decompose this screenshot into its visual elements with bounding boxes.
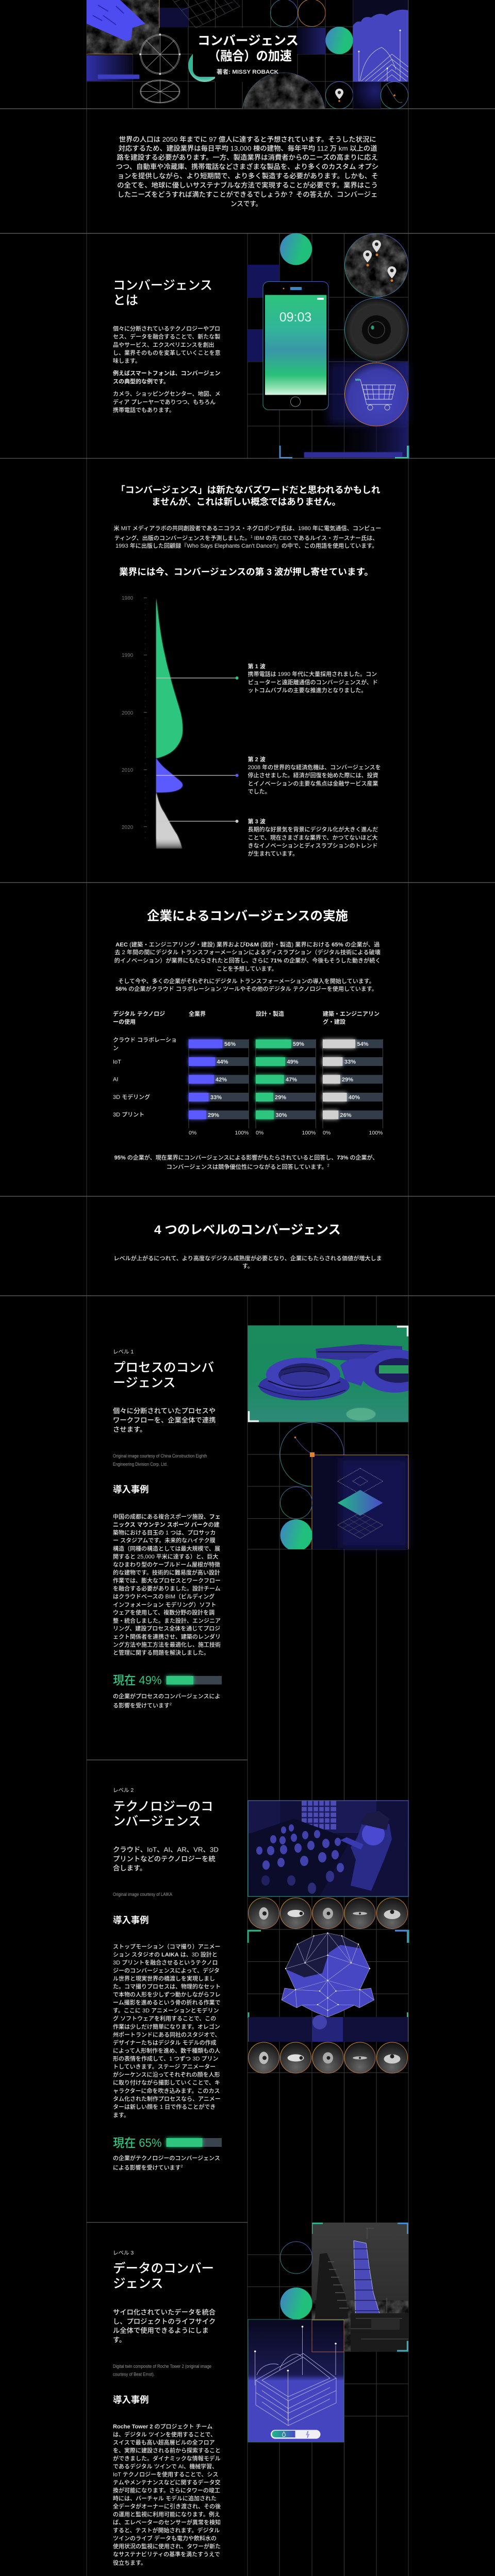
survey summary bbox=[114, 1154, 378, 1170]
level 1 text: 導入事例 bbox=[113, 1484, 149, 1495]
level 3 text: 使用状況の監視に使用され、タワーが新た bbox=[113, 2543, 221, 2550]
panel: what is convergence text: 個々に分断されているテクノロジーやプロ bbox=[113, 326, 220, 332]
curve circle bbox=[280, 1422, 344, 1486]
axis labels: 0% bbox=[189, 1130, 196, 1136]
bar values: 40% bbox=[349, 1094, 360, 1100]
puppet bbox=[340, 1811, 392, 1891]
level 1 text: Engineering Division Corp. Ltd. bbox=[113, 1462, 168, 1467]
photo: puppet faces bbox=[248, 1801, 408, 1896]
companies paragraph bbox=[114, 941, 381, 992]
stat: 49%: 現在 49% bbox=[113, 1673, 162, 1687]
intro paragraph: ョンを提供しながら、より短期間で、より多く製造する必要があります。しかも、そ bbox=[118, 172, 378, 180]
blue background glow bbox=[280, 362, 408, 458]
column headers: ーの使用 bbox=[113, 1018, 136, 1025]
survey summary: コンバージェンスは競争優位性につながると回答しています。 bbox=[167, 1164, 324, 1170]
level 2 text: た。コマ撮りプロセスは、物理的なセット bbox=[113, 1983, 221, 1990]
level 1 text: ージェンス bbox=[113, 1376, 176, 1390]
bar values bbox=[208, 1041, 369, 1118]
four levels intro: す。 bbox=[242, 1263, 253, 1269]
level 2 text: デザイナーたちはデジタル モデルの作成 bbox=[113, 2039, 217, 2046]
level 2 text: す。ここに 3D アニメーションとモデリン bbox=[113, 2007, 219, 2014]
wave 3 text bbox=[248, 818, 378, 857]
wheel circle bbox=[139, 33, 180, 75]
bars: all industries bbox=[189, 1040, 222, 1119]
level 1 text: を融合する必要がありました。設計チーム bbox=[113, 1585, 221, 1592]
diamond mesh bbox=[172, 0, 240, 28]
ring circles bbox=[270, 0, 325, 27]
stat: 65%: の企業がテクノロジーのコンバージェンス bbox=[113, 2155, 220, 2162]
panel: what is convergence text: 味します。 bbox=[113, 358, 141, 364]
axis labels: 100% bbox=[369, 1130, 383, 1136]
blue glow panel bbox=[87, 55, 139, 81]
column headers: グ・建設 bbox=[323, 1018, 345, 1025]
panel: smartphone collage bbox=[248, 233, 408, 458]
panel: what is convergence text: とは bbox=[113, 294, 138, 308]
wave 3 text: きなイノベーションとディスラプションのトレンド bbox=[248, 842, 378, 849]
level 2 text: に取り付けながら撮影していくことで、キ bbox=[113, 2079, 220, 2086]
level 1 images bbox=[248, 1326, 430, 1551]
wheel ellipse bbox=[140, 80, 180, 103]
level 2 text: トしていきます。ステージ アニメーター bbox=[113, 2063, 216, 2070]
axis labels bbox=[189, 1130, 383, 1136]
navy panel bbox=[353, 81, 381, 109]
level 3 text: courtesy of Beat Ernst). bbox=[113, 2372, 155, 2377]
bar values: 47% bbox=[286, 1077, 297, 1083]
level 3 text: ができました。ダイナミックな情報モデル bbox=[113, 2454, 221, 2462]
panel: digital twin bbox=[248, 2319, 344, 2442]
eye row 2 bbox=[249, 2042, 407, 2073]
wave 2 text: 停止させました。経済が回復を始めた際には、投資 bbox=[248, 772, 378, 779]
panel: what is convergence text: ディア プレーヤーでありつつ、もちろん bbox=[113, 398, 216, 405]
level 2 text: ル世界と現実世界の橋渡しを実現しまし bbox=[113, 1975, 215, 1982]
wave 1 text: ットコムバブルの主要な推進力となりました。 bbox=[248, 687, 367, 694]
green half circle bbox=[188, 54, 215, 82]
wave 1 shape bbox=[156, 598, 183, 758]
axis labels: 100% bbox=[235, 1130, 249, 1136]
level 1 text: ニックス マウンテン スポーツ パークの建 bbox=[113, 1521, 220, 1528]
level 3 text: テムやメンテナンスなどに関するデータ交 bbox=[113, 2479, 220, 2486]
year axis bbox=[122, 596, 147, 840]
level 3 text: Digital twin composite of Roche Tower 2 (original image bbox=[113, 2364, 211, 2369]
bar values: 29% bbox=[275, 1094, 286, 1100]
column headers: 建築・エンジニアリン bbox=[323, 1010, 380, 1017]
wave 1 text: 携帯電話は 1990 年代に大量採用されました。コン bbox=[248, 670, 377, 677]
intro paragraph: つつ、自動車や冷蔵庫、携帯電話などさまざまな製品を、より多くのカスタム オプシ bbox=[116, 162, 378, 171]
panel: what is convergence text: 品やサービス、エクスペリエンスを創出 bbox=[113, 342, 214, 348]
wall of faces bbox=[302, 1801, 336, 1829]
toggle pill bbox=[271, 2430, 321, 2439]
column headers: 全業界 bbox=[189, 1010, 206, 1017]
phone bbox=[263, 281, 328, 410]
companies paragraph: そして今や、多くの企業がそれぞれにデジタル トランスフォーメーションの導入を開始しています。 bbox=[118, 977, 375, 985]
year axis: 2000 bbox=[122, 710, 134, 716]
level 1 text: 開すると 25,000 平米に達する）と、巨大 bbox=[113, 1553, 218, 1560]
intro paragraph: 路を建設する必要があります。一方、製造業界は消費者からのニーズの高まりに応え bbox=[117, 153, 378, 161]
column headers: デジタル テクノロジ bbox=[113, 1010, 165, 1017]
panel: what is convergence text: 例えばスマートフォンは、コンバージェン bbox=[113, 369, 220, 377]
wave 3 text: 第 3 波 bbox=[248, 818, 266, 825]
image: stadium bbox=[248, 1325, 408, 1422]
level 2 text: Original image courtesy of LAIKA bbox=[113, 1892, 172, 1897]
level 3 text: Roche Tower 2 のプロジェクト チーム bbox=[113, 2423, 212, 2430]
level 2 text: ます。 bbox=[113, 2112, 129, 2119]
level 2 text: 州ポートランドにある同社のスタジオで、 bbox=[113, 2031, 221, 2038]
companies paragraph: ことを予想しています。 bbox=[217, 965, 277, 972]
bar values: 44% bbox=[217, 1059, 228, 1065]
history paragraph: 米 MIT メディアラボの共同創設者であるニコラス・ネグロポンテ氏は、1980 年に電気通信、コンピュー bbox=[113, 524, 381, 532]
row labels bbox=[113, 1037, 177, 1118]
level 3 text: し、プロジェクトのライフサイク bbox=[113, 2317, 216, 2325]
level 1 text: と管理に関する問題を解決しました。 bbox=[113, 1649, 209, 1656]
bar values: 30% bbox=[275, 1112, 287, 1118]
axis labels: 100% bbox=[302, 1130, 316, 1136]
level 2 text: 3D プリントを融合させるというテクノロ bbox=[113, 1959, 218, 1966]
level 2 text: で本物の人形を少しずつ動かしながらフレ bbox=[113, 1991, 221, 1998]
level 3 text: 換が可能になります。さらにタワーの竣工 bbox=[113, 2486, 220, 2494]
level 2 text: プリントなどのテクノロジーを統 bbox=[113, 1855, 216, 1863]
wave 1 text: ピューターと遠距離通信のコンバージェンスが、ド bbox=[248, 679, 378, 686]
year axis: 1990 bbox=[122, 653, 134, 658]
row labels: 3D モデリング bbox=[113, 1093, 150, 1100]
stat: 49%: の企業がプロセスのコンバージェンスによ bbox=[113, 1692, 221, 1700]
four levels intro bbox=[113, 1255, 382, 1269]
bar values: 26% bbox=[340, 1112, 352, 1118]
bar values: 54% bbox=[357, 1041, 369, 1047]
bars: architecture engineering construction bbox=[323, 1040, 355, 1119]
leader lines bbox=[156, 676, 238, 823]
level 1 text: ウェアを使用して、複数分野の設計を調 bbox=[113, 1609, 214, 1616]
bar values: 49% bbox=[287, 1059, 299, 1065]
green ball bbox=[280, 1519, 312, 1551]
wave 2 text: でした。 bbox=[248, 788, 271, 795]
intro paragraph: したニーズをどうすれば満たすことができるでしょうか？ その答えが、コンバージェ bbox=[118, 190, 377, 198]
level 2 text: ジーのコンバージェンスによって、デジタ bbox=[113, 1967, 220, 1974]
wave 3 text: 長期的な好景気を背景にデジタル化が大きく進んだ bbox=[248, 826, 378, 833]
intro paragraph: ンスです。 bbox=[230, 200, 262, 208]
level 1 text: 中国の成都にある複合スポーツ施設、フェ bbox=[113, 1513, 221, 1520]
level 3 text: であるデジタル ツインで AI、機械学習、 bbox=[113, 2463, 218, 2470]
level 3 text: ツインのライブ データも電力や飲料水の bbox=[113, 2535, 217, 2542]
history paragraph bbox=[113, 524, 381, 549]
panel: what is convergence text: し、業界そのものを変革していくことを意 bbox=[113, 349, 221, 357]
level 2 text: ャラクターに命を吹き込みます。このカス bbox=[113, 2087, 220, 2094]
buzzword heading bbox=[116, 485, 381, 507]
wave 2 text bbox=[248, 756, 381, 795]
level 1 text: 構造（同種の構造としては最大規模で、展 bbox=[113, 1545, 220, 1552]
axes bbox=[189, 1039, 383, 1128]
companies paragraph: 去 2 年間の間にデジタル トランスフォーメーションによるディスラプション（デジタル技術による破壊 bbox=[114, 948, 381, 956]
level 3 text: 役立ちます。 bbox=[113, 2559, 146, 2566]
wave 2 text: 第 2 波 bbox=[248, 756, 266, 763]
navy panel with diamonds bbox=[310, 1452, 408, 1549]
row labels: 3D プリント bbox=[113, 1111, 144, 1118]
wave 2 text: 2008 年の世界的な経済危機は、コンバージェンスを bbox=[248, 764, 381, 771]
level 2 text bbox=[113, 1787, 222, 2171]
photo: Roche tower bbox=[312, 2223, 408, 2352]
green circle bbox=[280, 233, 312, 265]
level 3 text: の運用と監視に利用可能になります。例え bbox=[113, 2511, 220, 2518]
level 3 images bbox=[248, 2223, 408, 2442]
survey summary: 95% の企業が、現在業界にコンバージェンスによる影響がもたらされていると回答し、73% の企業が、 bbox=[114, 1154, 378, 1161]
circle: camera lens bbox=[344, 298, 408, 362]
grey textured semicircle bbox=[242, 72, 325, 109]
title: （融合）の加速 bbox=[208, 49, 292, 63]
level 1 text: ー スタジアムです。未来的なハイテク膜 bbox=[113, 1537, 216, 1544]
level 3 text: すると、テストが開始されます。デジタル bbox=[113, 2527, 220, 2534]
history paragraph: 1 bbox=[251, 535, 253, 539]
tray bbox=[248, 1819, 351, 1896]
level 3 text bbox=[113, 2250, 222, 2576]
history paragraph: IBM の元 CEO であるルイス・ガースナー氏は、 bbox=[253, 535, 378, 541]
bar values: 29% bbox=[342, 1077, 353, 1083]
bar values: 42% bbox=[216, 1077, 227, 1083]
circle: map with pins bbox=[344, 233, 408, 297]
third wave heading: 業界には今、コンバージェンスの第 3 波が押し寄せています。 bbox=[119, 567, 373, 577]
wave 3 text: ことで、現在さまざまな業界で、かつてないほど大 bbox=[248, 834, 377, 841]
history paragraph: ティング、出版のコンバージェンスを予測しました。 bbox=[114, 535, 250, 541]
companies paragraph: 56% の企業がクラウド コラボレーション ツールやその他のデジタル テクノロジーを使用しています。 bbox=[116, 985, 377, 992]
panel: what is convergence text: コンバージェンス bbox=[113, 279, 212, 293]
wave 2 text: とイノベーションの主要な焦点は金融サービス産業 bbox=[248, 780, 378, 787]
level 3 text: ば、エレベーターのセンサーが異常を検知 bbox=[113, 2518, 221, 2526]
level 2 text: グ ソフトウェアを利用することで、この bbox=[113, 2015, 216, 2022]
bar values: 33% bbox=[210, 1094, 222, 1100]
panel: what is convergence text: スの典型的な例です。 bbox=[113, 378, 169, 385]
level 3 text: スイスで最も高い超高層ビルの全フロア bbox=[113, 2438, 215, 2446]
year axis: 2010 bbox=[122, 768, 134, 773]
circle: shopping cart bbox=[344, 363, 408, 426]
buzzword heading: 「コンバージェンス」は新たなバズワードだと思われるかもしれ bbox=[116, 485, 381, 495]
wave 1 text: 第 1 波 bbox=[248, 663, 266, 670]
row labels: IoT bbox=[113, 1059, 121, 1065]
row labels: ン bbox=[113, 1045, 119, 1052]
row labels: クラウド コラボレーショ bbox=[113, 1037, 177, 1043]
level 2 text: がシーケンスに沿ってそれぞれの顔を人形 bbox=[113, 2071, 220, 2078]
bars: design and manufacturing bbox=[256, 1040, 291, 1119]
level 3 text: ジェンス bbox=[113, 2277, 163, 2291]
level 3 text: は、デジタル ツインを使用することで、 bbox=[113, 2431, 216, 2438]
level 1 text: レベル 1 bbox=[113, 1349, 134, 1355]
bar values: 59% bbox=[293, 1041, 304, 1047]
level 1 text: ェクト関係者を連携させ、建築のレンダリ bbox=[113, 1633, 221, 1640]
year axis: 2020 bbox=[122, 825, 134, 831]
wave 3 text: が生まれています。 bbox=[248, 850, 298, 857]
level 3 text: 全データがオーナーに引き渡され、その後 bbox=[113, 2503, 221, 2510]
level 3 text: レベル 3 bbox=[113, 2250, 134, 2256]
level 1 text bbox=[113, 1349, 222, 1709]
intro paragraph: の全てを、地球に優しいサステナブルな方法で実現することが必要です。業界はこう bbox=[117, 181, 378, 189]
level 3 text: す。 bbox=[113, 2336, 126, 2344]
ring bbox=[280, 1487, 312, 1519]
panel: what is convergence text: カメラ、ショッピングセンター、地図、メ bbox=[113, 390, 221, 397]
level 1 text: させます。 bbox=[113, 1426, 146, 1433]
level 3 text: サイロ化されていたデータを統合 bbox=[113, 2308, 216, 2316]
heading: companies: 企業によるコンバージェンスの実施 bbox=[147, 909, 348, 923]
level 1 text: 整・統合しました。また設計、エンジニア bbox=[113, 1617, 221, 1624]
level 2 text: タム化された制作プロセスなら、アニメー bbox=[113, 2095, 221, 2102]
face mesh bbox=[248, 1931, 408, 2020]
panel edge bbox=[353, 0, 408, 81]
level 2 text: ンバージェンス bbox=[113, 1815, 201, 1828]
level 1 text: リング、建設プロセス全体を通じてプロジ bbox=[113, 1625, 220, 1632]
panel: what is convergence text bbox=[113, 279, 221, 413]
stat: 65% bbox=[113, 2136, 222, 2171]
stat: 49% bbox=[113, 1673, 222, 1709]
blue panel right of title bbox=[297, 28, 325, 54]
image: falcon on rock bbox=[87, 0, 159, 54]
curve circle bbox=[381, 81, 408, 109]
title: コンバージェンス bbox=[197, 34, 299, 48]
hatched diamond bbox=[338, 1513, 383, 1538]
level 3 text: 導入事例 bbox=[113, 2395, 149, 2405]
wave 2 shape bbox=[156, 758, 183, 792]
level 1 text: インフォメーション モデリング）ソフト bbox=[113, 1601, 217, 1608]
tracks bbox=[189, 1040, 383, 1119]
wave 3 shape bbox=[156, 792, 182, 849]
chart: digital technology use bbox=[113, 1010, 383, 1136]
gradient diamond bbox=[338, 1490, 383, 1516]
four levels intro: レベルが上がるにつれて、より高度なデジタル成熟度が必要となり、企業にもたらされる価値が増大しま bbox=[113, 1255, 382, 1262]
chart: three waves timeline bbox=[122, 596, 381, 857]
level 2 images bbox=[248, 1801, 408, 2073]
level 1 text: 作業では、膨大なプロセスとワークフロー bbox=[113, 1577, 221, 1584]
navy textures bbox=[248, 265, 279, 362]
axis labels: 0% bbox=[256, 1130, 263, 1136]
level 2 text: ーム撮影を進めるという骨の折れる作業で bbox=[113, 1999, 221, 2006]
level 3 text: データのコンバー bbox=[113, 2261, 214, 2276]
title: 著者: MISSY ROBACK bbox=[217, 68, 278, 75]
level 1 text: なひまわり型のケーブルドーム屋根が特徴 bbox=[113, 1561, 220, 1568]
companies paragraph: AEC (建築・エンジニアリング・建設) 業界および D&M (設計・製造) 業界における 65% の企業が、過 bbox=[116, 941, 380, 948]
year axis: 1980 bbox=[122, 596, 134, 601]
eye row 1 bbox=[249, 1898, 407, 1929]
level 2 text: ストップモーション（コマ撮り）アニメー bbox=[113, 1943, 221, 1950]
intro paragraph: 対応するため、建設業界は毎日平均 13,000 棟の建物、毎年平均 112 万 km 以上の道 bbox=[119, 144, 377, 152]
stat: 65%: 2 bbox=[181, 2165, 183, 2168]
buzzword heading: ませんが、これは新しい概念ではありません。 bbox=[152, 497, 341, 507]
bar values: 56% bbox=[224, 1041, 236, 1047]
column headers: 設計・製造 bbox=[256, 1010, 284, 1017]
level 2 text: クラウド、IoT、AI、AR、VR、3D bbox=[113, 1846, 219, 1854]
level 1 text: 的な建物です。技術的に難易度が高い設計 bbox=[113, 1569, 220, 1576]
green ball bbox=[280, 2287, 312, 2319]
hero collage bbox=[87, 0, 408, 109]
cloud panel with pins bbox=[353, 0, 408, 82]
axis labels: 0% bbox=[323, 1130, 331, 1136]
history paragraph: 1993 年に出版した回顧録『Who Says Elephants Can't Dance?』の中で、この用語を使用しています。 bbox=[116, 542, 377, 549]
level 2 text: レベル 2 bbox=[113, 1787, 134, 1793]
level 3 text: を、実際に建設される前から探索すること bbox=[113, 2447, 221, 2454]
stat: 65%: による影響を受けています bbox=[113, 2165, 181, 2171]
level 1 text: ング方法や施工方法を最適化し、施工技術 bbox=[113, 1641, 221, 1648]
ring bbox=[280, 2242, 312, 2274]
title mask bbox=[193, 28, 297, 77]
title bbox=[197, 34, 299, 75]
wave 1 text bbox=[248, 663, 378, 694]
row labels: AI bbox=[113, 1077, 118, 1083]
photo: puppet faces lower bbox=[248, 2015, 408, 2042]
panel: what is convergence text: 携帯電話でもあります。 bbox=[113, 406, 175, 413]
level 1 text: 築物における目玉の 1 つは、プロサッカ bbox=[113, 1529, 216, 1536]
intro paragraph: 世界の人口は 2050 年までに 97 億人に達すると予想されています。そうした状況に bbox=[119, 135, 376, 143]
level 1 text: ワークフローを、企業全体で連携 bbox=[113, 1416, 216, 1424]
green circle bbox=[325, 27, 353, 54]
survey summary: 2 bbox=[327, 1164, 329, 1167]
level 2 text: 合します。 bbox=[113, 1864, 146, 1872]
level 3 text: なサステナビリティの基準を満たすうえで bbox=[113, 2551, 220, 2558]
pin circle bbox=[326, 81, 353, 109]
level 3 text: 時には、バーチャル モデルに追加された bbox=[113, 2495, 217, 2502]
level 2 text: によって人形制作を進め、数千種類もの人 bbox=[113, 2047, 220, 2054]
panel: what is convergence text: セス、データを融合することで、新たな製 bbox=[113, 333, 220, 340]
level 1 text: 個々に分断されていたプロセスや bbox=[113, 1407, 216, 1415]
stat: 49%: 2 bbox=[170, 1703, 172, 1706]
stat: 65%: 現在 65% bbox=[113, 2136, 162, 2149]
level 2 text: テクノロジーのコ bbox=[113, 1800, 213, 1814]
level 2 text: ション スタジオの LAIKA は、3D 設計と bbox=[113, 1951, 218, 1958]
level 3 text: ル全体で使用できるようにしま bbox=[113, 2327, 209, 2334]
bar values: 29% bbox=[208, 1112, 219, 1118]
phone: 09:03 bbox=[279, 310, 311, 325]
level 2 text: 導入事例 bbox=[113, 1915, 149, 1925]
stat: 49%: る影響を受けています bbox=[113, 1703, 170, 1709]
level 2 text: 作業は少しだけ簡単になります。オレゴン bbox=[113, 2023, 220, 2030]
intro paragraph bbox=[116, 135, 378, 208]
column headers bbox=[113, 1010, 380, 1025]
dashed diamond bbox=[338, 1468, 383, 1494]
level 2 text: ターは新しい顔を 1 日で作ることができ bbox=[113, 2103, 216, 2110]
heading: four levels: 4 つのレベルのコンバージェンス bbox=[154, 1223, 341, 1237]
level 2 text: 形の表情を作成して、1 つずつ 3D プリン bbox=[113, 2055, 218, 2062]
level 1 text: Original image courtesy of China Construction Eighth bbox=[113, 1453, 207, 1459]
bar values: 33% bbox=[344, 1059, 356, 1065]
companies paragraph: 的イノベーション）が業界にもたらされたと回答し、さらに 71% の企業が、今後もそうした動きが続く bbox=[114, 957, 381, 964]
level 1 text: プロセスのコンバ bbox=[113, 1360, 214, 1375]
level 1 text: はクラウドベースの BIM（ビルディング bbox=[113, 1593, 214, 1600]
navy panel under mesh bbox=[160, 8, 188, 27]
level 3 text: IoT テクノロジーを使用することで、シス bbox=[113, 2470, 218, 2478]
